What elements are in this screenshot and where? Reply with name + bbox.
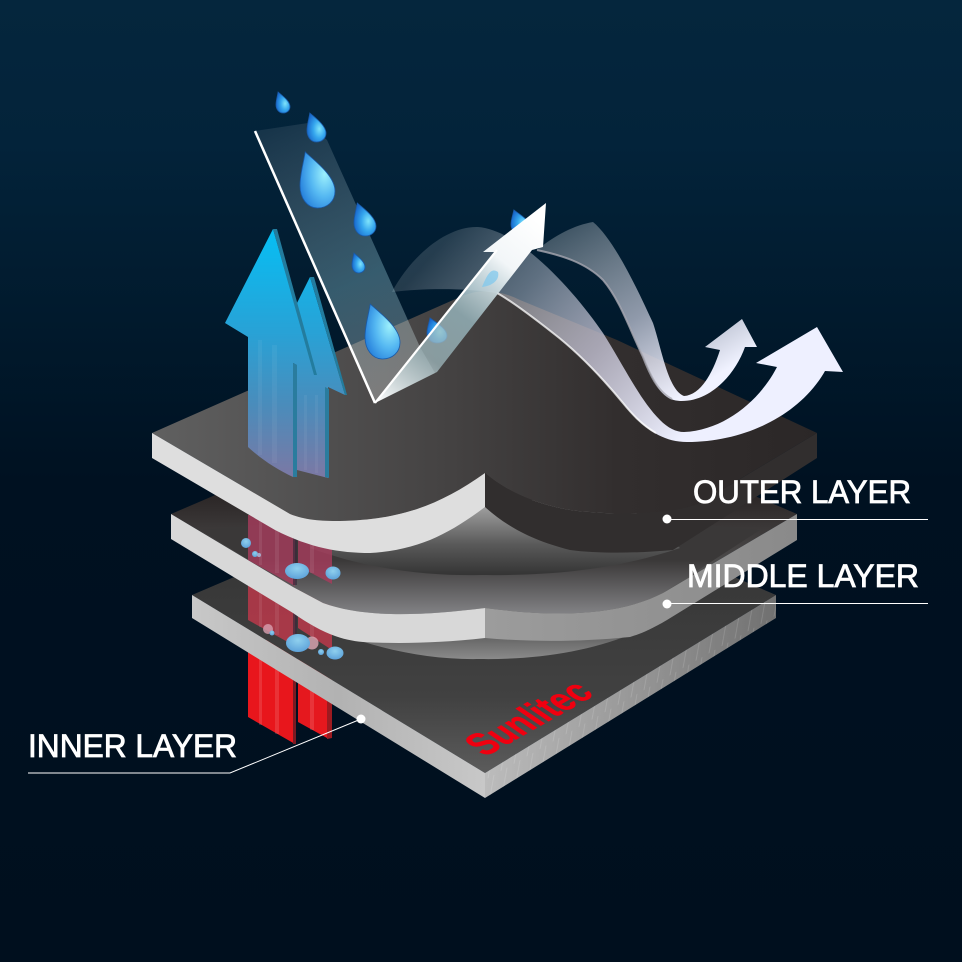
- label: outer layer: [662, 474, 928, 524]
- pink columns between inner and middle layer: [248, 575, 332, 650]
- faded droplet on arrow: [482, 271, 498, 287]
- moisture bubbles on middle layer: [241, 538, 340, 580]
- white rising arrow: [375, 203, 546, 403]
- inner layer slab: [192, 470, 776, 798]
- pink columns between middle and outer layer: [248, 515, 332, 586]
- droplet 2: [307, 113, 326, 142]
- label: middle layer: MIDDLE LAYER: [687, 558, 919, 594]
- label: middle layer: [662, 558, 928, 608]
- transparent plate with droplets: [255, 92, 530, 403]
- droplet 4: [354, 203, 376, 236]
- droplet 5: [352, 253, 365, 273]
- swoosh arrow: large, front: [392, 227, 843, 442]
- label: inner layer: INNER LAYER: [28, 728, 237, 764]
- swoosh arrow: small, rear: [537, 222, 757, 401]
- label: inner layer: [28, 714, 366, 773]
- droplet 1: [276, 92, 290, 113]
- blue arrow: small: [297, 277, 347, 478]
- plate edge line: [255, 131, 375, 403]
- middle layer slab: [171, 380, 797, 643]
- droplet 6: large: [365, 304, 400, 359]
- droplet 8: by arrow head: [511, 210, 530, 234]
- blue arrow: large: [225, 229, 317, 477]
- shadow crescent under outer layer: [310, 500, 680, 575]
- red columns below the inner layer: [248, 640, 332, 744]
- moisture bubbles on inner layer: [263, 624, 344, 660]
- outer layer slab: [152, 291, 817, 553]
- shadow crescent under middle layer: [330, 628, 645, 659]
- brand: Sunlitec: Sunlitec: [454, 674, 603, 762]
- droplet 7: behind arrow: [427, 318, 447, 343]
- label: outer layer: OUTER LAYER: [693, 474, 911, 510]
- droplet 3: large: [300, 152, 335, 208]
